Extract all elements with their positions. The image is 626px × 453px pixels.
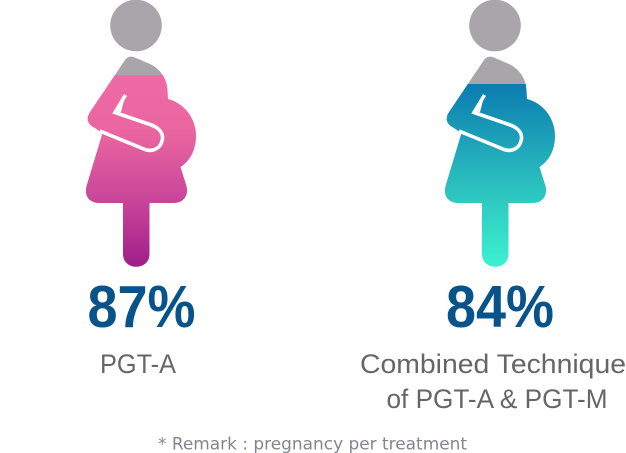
label: Combined Technique of PGT-A & PGT-M: Combined Technique (360, 349, 626, 379)
figure: pink pregnant woman (86, 0, 196, 267)
label: Combined Technique of PGT-A & PGT-M: of PGT-A & PGT-M (386, 384, 608, 414)
label: Combined Technique of PGT-A & PGT-M (360, 349, 626, 414)
icon: head (469, 0, 521, 51)
label: PGT-A: PGT-A (100, 349, 176, 379)
icon: arm outline (100, 95, 162, 150)
icon: body (445, 57, 555, 267)
icon: head (110, 0, 162, 51)
icon: body (86, 57, 196, 267)
figure: teal pregnant woman (445, 0, 555, 267)
icon: arm outline (459, 95, 522, 150)
stat: 87%: 87% (88, 274, 196, 340)
stat: 84%: 84% (446, 274, 554, 340)
